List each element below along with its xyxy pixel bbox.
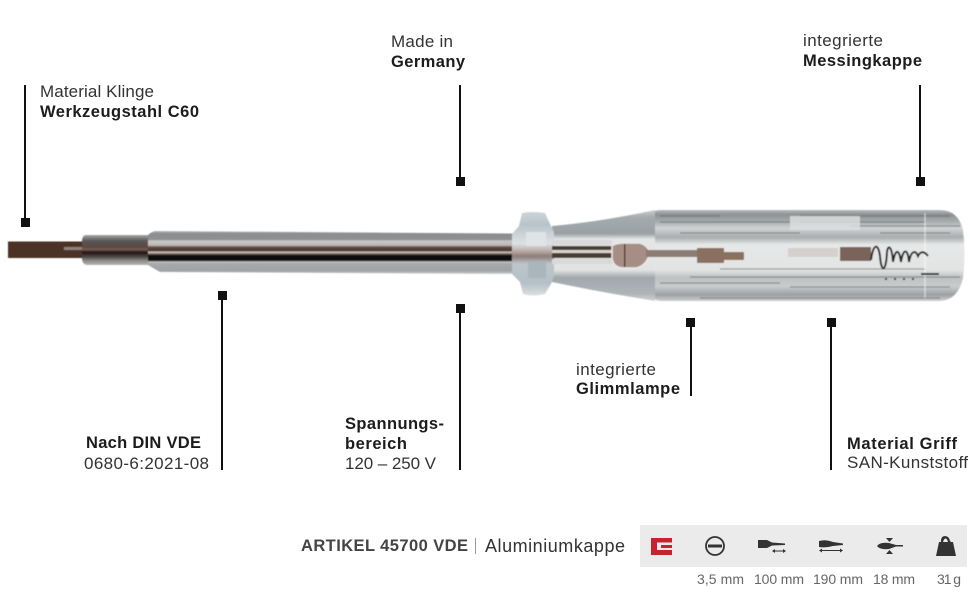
callout: Material Griff: Material Griff (847, 435, 958, 453)
callout: Material Klinge (21, 82, 199, 227)
callout: Nach DIN VDE: Nach DIN VDE (86, 434, 201, 452)
callout: Spannungsbereich: Spannungs- (345, 415, 444, 433)
spec values: 100 mm (754, 571, 804, 587)
callout: Messingkappe: Messingkappe (803, 52, 922, 70)
icon: slotted screw head (706, 537, 724, 555)
glow lamp electrodes (697, 248, 724, 263)
callout: Messingkappe (803, 31, 925, 186)
shaft (148, 231, 513, 274)
spec icon bar (640, 525, 967, 567)
spec values: 190 mm (813, 571, 863, 587)
callout: Made in Germany: Germany (391, 53, 466, 71)
inner stem and connector (552, 246, 612, 258)
callout: Material Klinge: Werkzeugstahl C60 (40, 103, 199, 121)
callout: Glimmlampe (576, 318, 695, 398)
hex flange (512, 212, 554, 296)
callout: Glimmlampe: Glimmlampe (576, 380, 680, 398)
spec values: 31 g (937, 571, 961, 587)
spec values: 18 mm (873, 571, 915, 587)
callout: Made in Germany (391, 32, 466, 186)
handle ribs (660, 216, 960, 298)
icon: total length (819, 540, 843, 552)
article title (301, 536, 625, 556)
collar (82, 235, 148, 265)
icon: blade length (758, 540, 786, 553)
callout: Made in Germany: Made in (391, 32, 453, 51)
icon: brand logo (651, 538, 672, 555)
handle body (655, 210, 964, 301)
callout: Nach DIN VDE (84, 291, 227, 473)
article title: ARTIKEL 45700 VDE (301, 537, 468, 555)
icon: handle diameter (877, 538, 903, 554)
callout: Spannungsbereich: 120 – 250 V (345, 454, 437, 473)
callout: Material Griff: SAN-Kunststoff (847, 453, 968, 472)
screwdriver voltage tester (8, 210, 964, 301)
callout: Nach DIN VDE: 0680-6:2021-08 (84, 454, 209, 473)
spec values (697, 571, 961, 587)
callout: Material Klinge: Material Klinge (40, 82, 154, 101)
callout: Glimmlampe: integrierte (576, 360, 656, 379)
callout: Spannungsbereich: bereich (345, 435, 407, 453)
spring (871, 247, 928, 268)
blade (8, 242, 82, 258)
handle neck (552, 210, 655, 301)
callout: Messingkappe: integrierte (803, 31, 883, 50)
callout: Material Griff (827, 318, 968, 472)
article title: Aluminiumkappe (485, 536, 625, 556)
icon: weight (936, 536, 956, 556)
callout: Spannungsbereich (345, 304, 465, 473)
spec values: 3,5 mm (697, 571, 744, 587)
